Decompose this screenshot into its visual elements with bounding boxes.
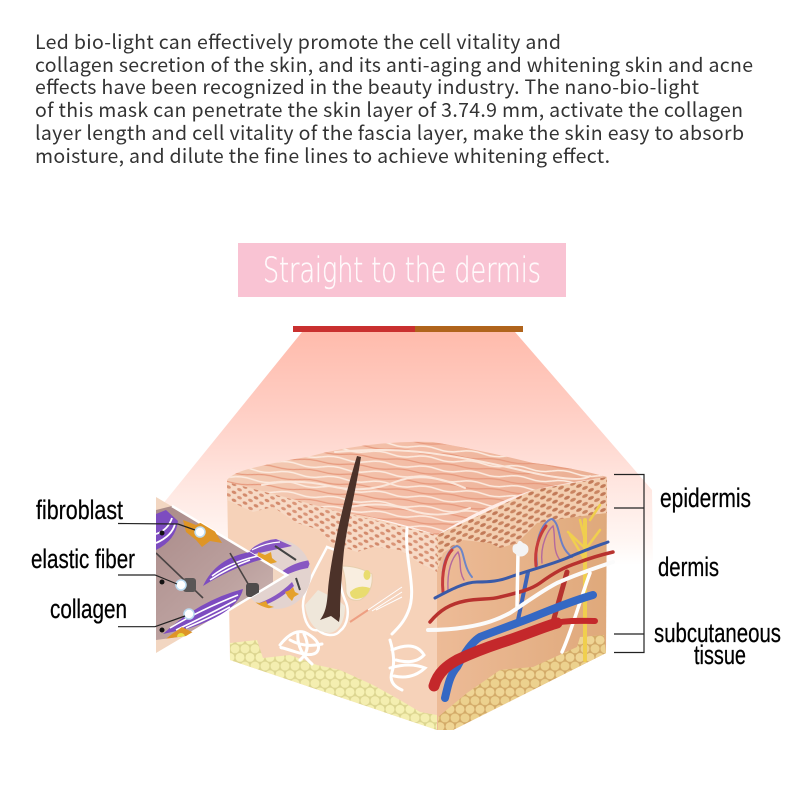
right labels: tissue bbox=[694, 640, 746, 670]
left face of skin bbox=[227, 480, 437, 730]
left labels: elastic fiber bbox=[31, 544, 135, 574]
inset outer circle bbox=[250, 539, 311, 609]
sweat ducts and coils bbox=[280, 528, 425, 690]
intro text block: collagen secretion of the skin, and its anti-aging and whitening skin and acne bbox=[35, 49, 753, 78]
blood vessels bbox=[428, 542, 613, 698]
elastic fibres bbox=[156, 553, 254, 598]
inset triangle interior bbox=[156, 506, 273, 640]
right labels bbox=[654, 483, 781, 670]
light source bar bbox=[293, 326, 523, 332]
intro text block: moisture, and dilute the fine lines to achieve whitening effect. bbox=[35, 140, 610, 169]
hair shaft bbox=[320, 456, 361, 622]
epidermis cell band right bbox=[437, 477, 607, 572]
left labels: collagen bbox=[50, 594, 127, 624]
nerve bbox=[568, 505, 600, 660]
right face of skin bbox=[437, 477, 607, 730]
subcutaneous fat left bbox=[230, 640, 437, 730]
left labels bbox=[31, 495, 135, 624]
inset white borders bbox=[172, 506, 287, 636]
fibroblast cells bbox=[183, 520, 222, 547]
intro text block: layer length and cell vitality of the fascia layer, make the skin easy to absorb bbox=[35, 117, 744, 146]
left leader lines bbox=[118, 524, 195, 627]
hair follicle bbox=[303, 547, 372, 635]
light beam bbox=[158, 332, 653, 565]
intro text block: of this mask can penetrate the skin layer of 3.74.9 mm, activate the collagen bbox=[35, 94, 743, 123]
skin cube diagram bbox=[227, 442, 613, 730]
title banner bbox=[238, 243, 566, 297]
intro text block: Led bio-light can effectively promote the cell vitality and bbox=[35, 26, 561, 55]
intro text block: effects have been recognized in the beauty industry. The nano-bio-light bbox=[35, 71, 700, 100]
callout dots bbox=[176, 527, 205, 619]
left labels: fibroblast bbox=[36, 495, 123, 525]
collagen fibres bbox=[156, 510, 178, 550]
capillary loops bbox=[442, 519, 572, 592]
arrector muscle bbox=[350, 584, 402, 622]
right bracket lines bbox=[614, 474, 644, 652]
sebaceous gland bbox=[342, 566, 372, 600]
top skin surface bbox=[227, 442, 607, 535]
right labels: epidermis bbox=[660, 483, 751, 513]
subcutaneous fat right bbox=[438, 635, 606, 730]
epidermis cell band left bbox=[227, 482, 437, 572]
inset triangle base bbox=[156, 497, 288, 653]
white gland blob bbox=[512, 541, 528, 556]
right labels: dermis bbox=[658, 552, 719, 582]
intro text block bbox=[35, 26, 753, 169]
title banner: Straight to the dermis bbox=[263, 251, 541, 291]
magnified inset bbox=[156, 497, 311, 653]
